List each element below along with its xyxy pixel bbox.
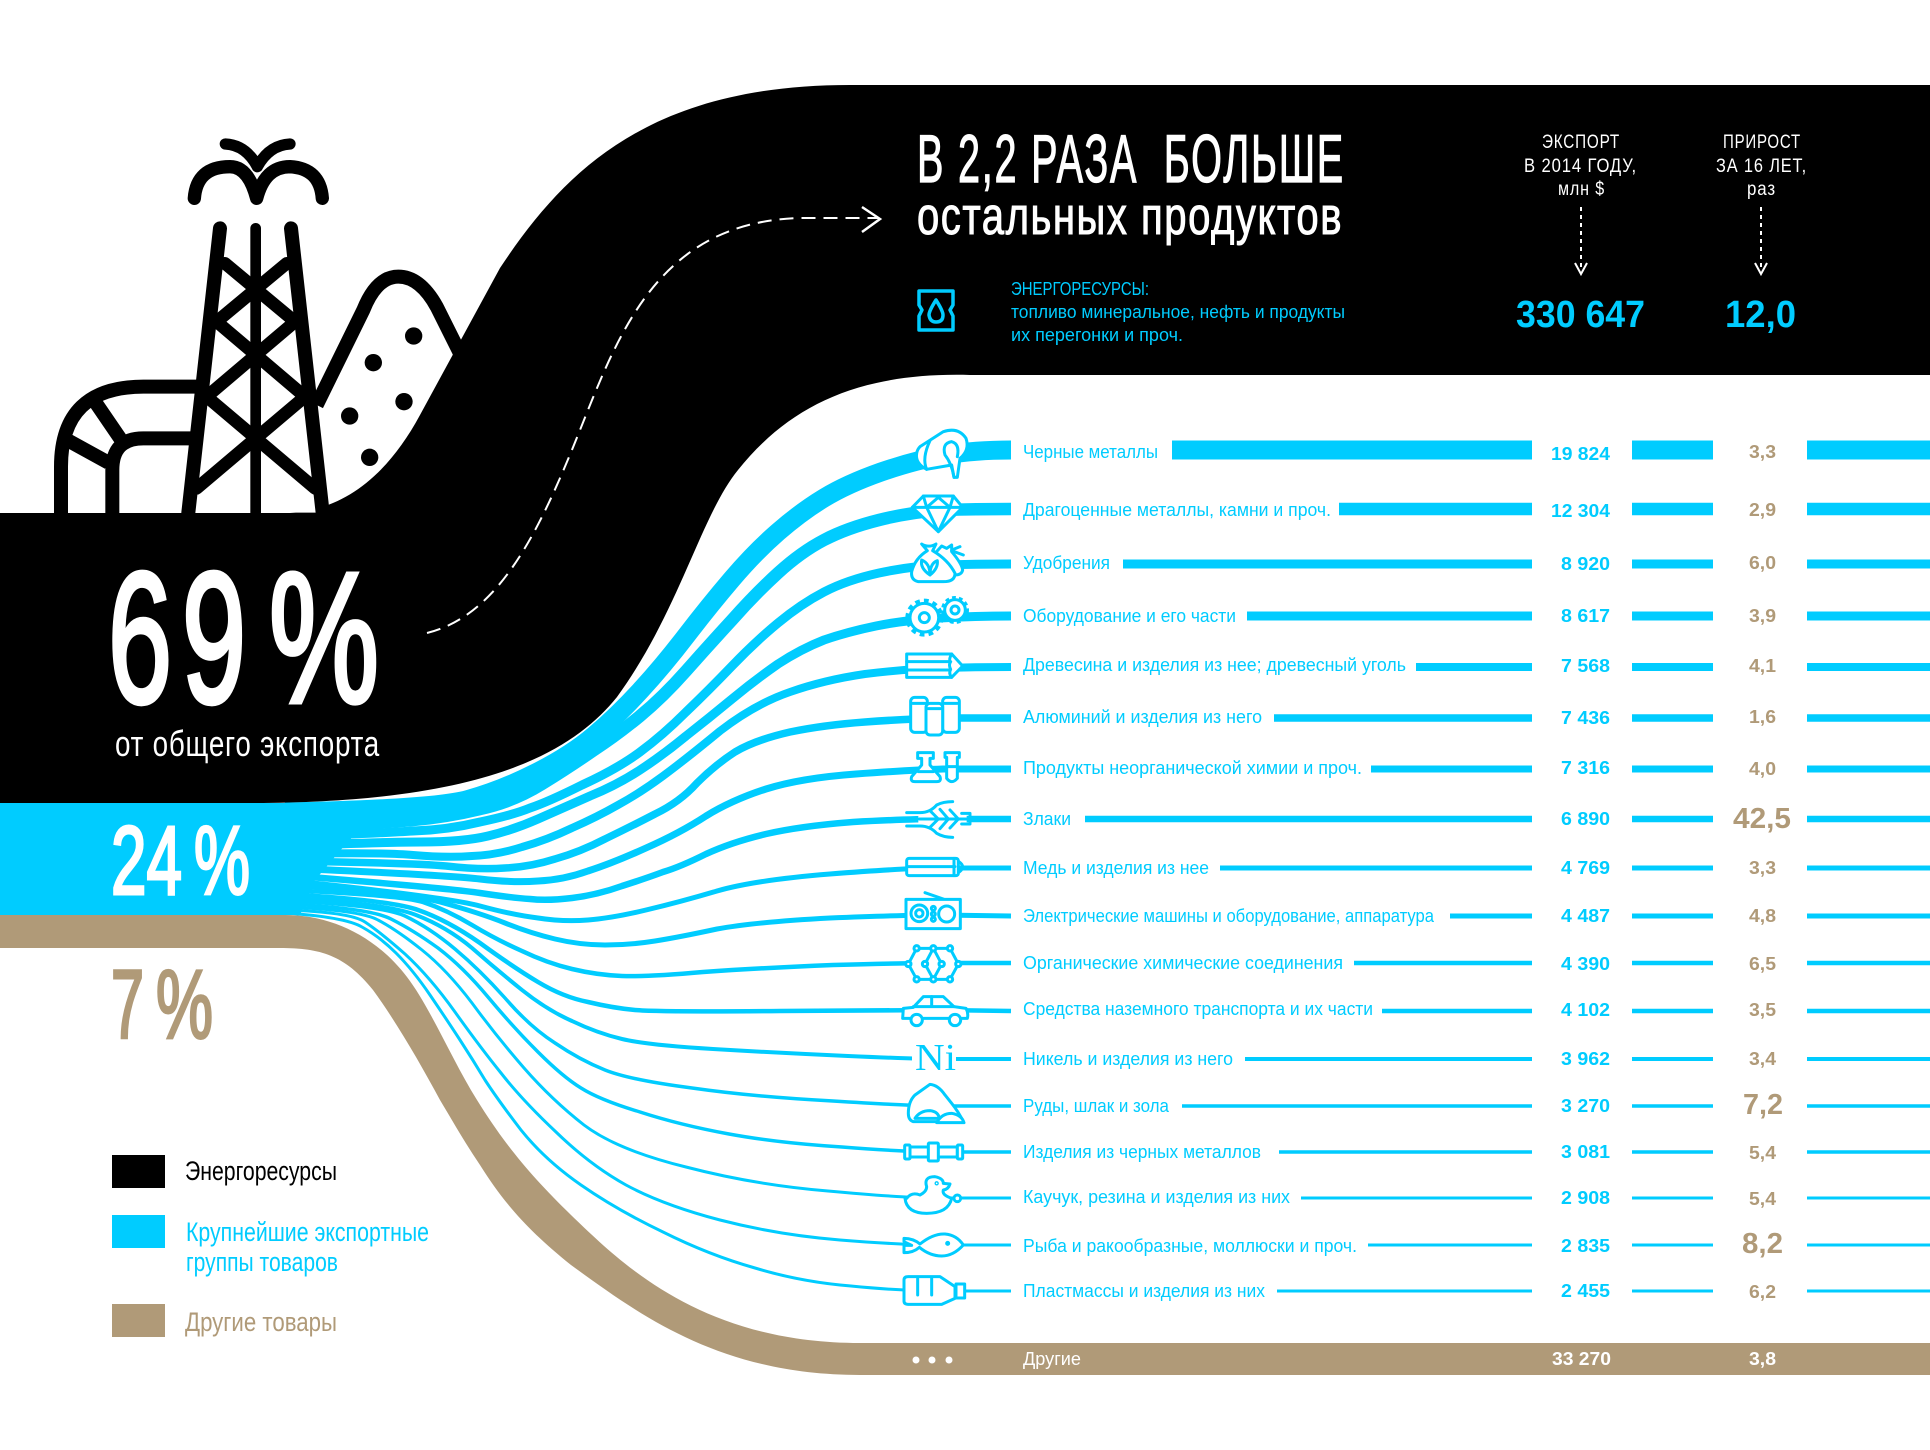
bars	[1277, 1290, 1930, 1292]
arrow head	[862, 207, 880, 232]
tan band: other goods	[0, 915, 1930, 1375]
export value: 8 920	[1561, 554, 1610, 574]
row: equipment	[1023, 606, 1930, 626]
bars	[1339, 503, 1930, 515]
illustration: oil rig with pipe and mound	[61, 144, 463, 515]
growth value: 6,2	[1749, 1282, 1776, 1302]
heading	[917, 121, 1345, 246]
column header: growth: ЗА 16 ЛЕТ,	[1716, 156, 1807, 177]
label: Злаки	[1023, 809, 1071, 829]
growth value: 42,5	[1733, 803, 1791, 835]
growth value: 5,4	[1749, 1143, 1776, 1163]
mound with dots	[317, 277, 463, 405]
export value: 19 824	[1551, 444, 1610, 464]
stat: 69%: %	[269, 535, 379, 742]
bars	[1085, 816, 1930, 822]
bars	[1245, 1057, 1930, 1061]
icon: nickel symbol: Ni	[915, 1037, 956, 1079]
flow: fertilizers	[285, 564, 1011, 837]
column header: growth: ПРИРОСТ	[1723, 132, 1801, 153]
energy description	[1011, 279, 1345, 345]
flow: vehicles	[285, 894, 1011, 1011]
icon: gears	[908, 598, 967, 634]
legend label: largest groups: Крупнейшие экспортные	[186, 1217, 429, 1247]
bars	[1301, 1196, 1930, 1200]
oil fountain top	[225, 144, 290, 167]
icon: pencil	[907, 654, 963, 677]
export value: 2 908	[1561, 1188, 1610, 1208]
icon: rubber duck	[905, 1177, 961, 1213]
growth value: 4,0	[1749, 759, 1776, 779]
row: inorganic chemistry	[1023, 758, 1930, 779]
bars	[1279, 1150, 1930, 1154]
row: precious metals	[1023, 500, 1930, 521]
black band: energy resources	[0, 85, 1930, 803]
flow: black metals	[285, 450, 1011, 812]
value: energy export: 330 647	[1516, 294, 1645, 336]
row: fertilizers	[1023, 553, 1930, 574]
stat: 24%: 24	[111, 806, 182, 915]
icon: fertilizer bags	[912, 544, 963, 582]
row: copper	[1023, 858, 1930, 878]
label: Каучук, резина и изделия из них	[1023, 1187, 1290, 1207]
label: Медь и изделия из нее	[1023, 858, 1209, 878]
icon: car	[903, 997, 968, 1026]
label: Алюминий и изделия из него	[1023, 707, 1262, 727]
growth value: 7,2	[1743, 1089, 1783, 1121]
icon: fish	[904, 1234, 963, 1256]
row: black metals	[1023, 442, 1930, 464]
stat: 69%	[108, 535, 379, 742]
label: Продукты неорганической химии и проч.	[1023, 758, 1362, 778]
bars	[1371, 766, 1930, 772]
growth value: 3,9	[1749, 606, 1776, 626]
arrow head: growth	[1755, 263, 1767, 274]
export value: 2 455	[1561, 1281, 1610, 1301]
flow: inorganic chemistry	[285, 769, 1011, 882]
flow: fish	[285, 910, 1011, 1245]
bars	[1382, 1009, 1930, 1013]
label: Драгоценные металлы, камни и проч.	[1023, 500, 1331, 520]
column header: export: млн $	[1558, 179, 1605, 200]
column header: export: В 2014 ГОДУ,	[1524, 156, 1637, 177]
arrow head: export	[1575, 263, 1587, 274]
dots	[912, 1356, 952, 1364]
icon: radio	[906, 893, 960, 929]
label: Удобрения	[1023, 553, 1110, 573]
row: cereals	[1023, 803, 1930, 835]
oil fountain	[194, 167, 322, 198]
export value: 2 835	[1561, 1236, 1610, 1256]
legend label: largest groups line 2: группы товаров	[186, 1247, 338, 1277]
label: Изделия из черных металлов	[1023, 1142, 1261, 1162]
export value: 6 890	[1561, 809, 1610, 829]
label: Органические химические соединения	[1023, 953, 1343, 973]
row: aluminium	[1023, 707, 1930, 728]
growth value: 3,3	[1749, 442, 1776, 462]
flow: electric machines	[285, 885, 1011, 945]
export value: 3 270	[1561, 1096, 1610, 1116]
dashed arrow	[427, 218, 878, 633]
column header: growth	[1716, 132, 1807, 200]
label: Оборудование и его части	[1023, 606, 1236, 626]
growth value: 4,8	[1749, 906, 1776, 926]
export value: 33 270	[1552, 1349, 1611, 1369]
label: Электрические машины и оборудование, аппаратура	[1023, 906, 1435, 926]
stat: 7%: %	[156, 950, 213, 1059]
dotted arrow: growth	[1760, 207, 1762, 270]
icon: steel coil	[916, 430, 967, 477]
growth value: 6,0	[1749, 553, 1776, 573]
label: Другие	[1023, 1349, 1081, 1369]
label: Древесина и изделия из нее; древесный уголь	[1023, 655, 1406, 675]
flow: precious metals	[285, 509, 1011, 827]
value: energy growth: 12,0	[1725, 294, 1796, 336]
export value: 7 316	[1561, 758, 1610, 778]
export value: 4 487	[1561, 906, 1610, 926]
pipe	[61, 387, 203, 515]
growth value: 3,4	[1749, 1049, 1776, 1069]
derrick legs	[188, 228, 323, 513]
growth value: 8,2	[1742, 1228, 1783, 1260]
growth value: 3,3	[1749, 858, 1776, 878]
flow streams from blue band to product rows	[285, 450, 1011, 1291]
growth value: 6,5	[1749, 954, 1776, 974]
export value: 12 304	[1551, 501, 1610, 521]
column header: export	[1524, 132, 1637, 200]
legend swatch: energy	[112, 1155, 165, 1188]
bars	[1182, 1104, 1930, 1108]
flow: nickel	[285, 898, 1011, 1059]
growth value: 4,1	[1749, 656, 1776, 676]
export value: 3 962	[1561, 1049, 1610, 1069]
icon: flask and test tube	[911, 753, 959, 782]
row: iron products	[1023, 1142, 1930, 1163]
row: nickel	[1023, 1049, 1930, 1069]
dotted arrow: export	[1580, 207, 1582, 270]
icon: diamond	[912, 496, 963, 532]
icon: plastic bottle	[904, 1277, 965, 1304]
row: vehicles	[1023, 999, 1930, 1020]
flow: wood	[285, 667, 1011, 857]
export value: 3 081	[1561, 1142, 1610, 1162]
bars	[1220, 866, 1930, 870]
bars	[1247, 612, 1930, 620]
growth value: 1,6	[1749, 707, 1776, 727]
flow: ores	[285, 901, 1011, 1106]
icon: ore rocks	[908, 1084, 964, 1123]
stat: 7%: 7	[111, 950, 144, 1059]
export value: 8 617	[1561, 606, 1610, 626]
energy description: ЭНЕРГОРЕСУРСЫ:	[1011, 279, 1149, 299]
label: Никель и изделия из него	[1023, 1049, 1233, 1069]
flow: iron products	[285, 904, 1011, 1152]
legend label: energy: Энергоресурсы	[185, 1156, 337, 1186]
export value: 7 436	[1561, 708, 1610, 728]
label: Пластмассы и изделия из них	[1023, 1281, 1265, 1301]
legend swatch: largest groups	[112, 1215, 165, 1248]
bars	[1416, 663, 1930, 671]
label: Рыба и ракообразные, моллюски и проч.	[1023, 1236, 1357, 1256]
stat: 7%	[111, 950, 213, 1059]
column header: growth: раз	[1747, 179, 1776, 200]
icon: pipe	[905, 1143, 963, 1161]
mound dots	[341, 327, 422, 466]
flow: equipment	[285, 616, 1011, 846]
bars	[1354, 961, 1930, 965]
heading line 1: В 2,2 РАЗА БОЛЬШЕ	[917, 121, 1345, 197]
flow: plastics	[285, 913, 1011, 1291]
bars	[1450, 914, 1930, 918]
blue band 24%	[0, 803, 385, 915]
icon: wheat	[907, 802, 972, 837]
icon: aluminium cans	[911, 697, 959, 735]
flow: rubber	[285, 907, 1011, 1198]
row: fish	[1023, 1228, 1930, 1260]
flow: cereals	[285, 819, 1011, 900]
bars	[1368, 1244, 1930, 1246]
energy description: топливо минеральное, нефть и продукты	[1011, 302, 1345, 322]
stat: 69%: 9	[182, 535, 246, 742]
column header: export: ЭКСПОРТ	[1542, 132, 1620, 153]
export value: 4 390	[1561, 954, 1610, 974]
growth value: 3,5	[1749, 1000, 1776, 1020]
row: electric machines	[1023, 906, 1930, 926]
stat: 24%: %	[194, 806, 250, 915]
derrick braces	[197, 263, 315, 488]
export value: 7 568	[1561, 656, 1610, 676]
growth value: 2,9	[1749, 500, 1776, 520]
icon: oil barrel	[919, 291, 953, 330]
bars	[1123, 560, 1930, 568]
row: wood	[1023, 655, 1930, 676]
label: Средства наземного транспорта и их части	[1023, 999, 1373, 1019]
derrick white backing	[188, 228, 323, 513]
row: others	[912, 1349, 1776, 1369]
legend swatch: other	[112, 1304, 165, 1337]
row: rubber	[1023, 1187, 1930, 1209]
caption: of total export: от общего экспорта	[115, 723, 380, 764]
row: organic chemistry	[1023, 953, 1930, 974]
export value: 4 102	[1561, 1000, 1610, 1020]
energy description: их перегонки и проч.	[1011, 325, 1183, 345]
legend label: other: Другие товары	[185, 1307, 337, 1337]
flow: copper	[285, 868, 1011, 921]
label: Черные металлы	[1023, 442, 1158, 462]
export value: 4 769	[1561, 858, 1610, 878]
heading line 2: остальных продуктов	[917, 187, 1343, 246]
label: Руды, шлак и зола	[1023, 1096, 1170, 1116]
flow: aluminium	[285, 718, 1011, 869]
growth value: 5,4	[1749, 1189, 1776, 1209]
bars	[1274, 714, 1930, 722]
icon: molecule	[906, 946, 961, 982]
stat: 69%: 6	[108, 535, 172, 742]
derrick centre post	[240, 228, 272, 513]
bars	[1172, 440, 1930, 460]
growth value: 3,8	[1749, 1349, 1776, 1369]
row: plastics	[1023, 1281, 1930, 1302]
row: ores	[1023, 1089, 1930, 1121]
legend	[112, 1155, 429, 1337]
icon: copper cylinder	[907, 858, 963, 876]
flow: organic chemistry	[285, 890, 1011, 976]
